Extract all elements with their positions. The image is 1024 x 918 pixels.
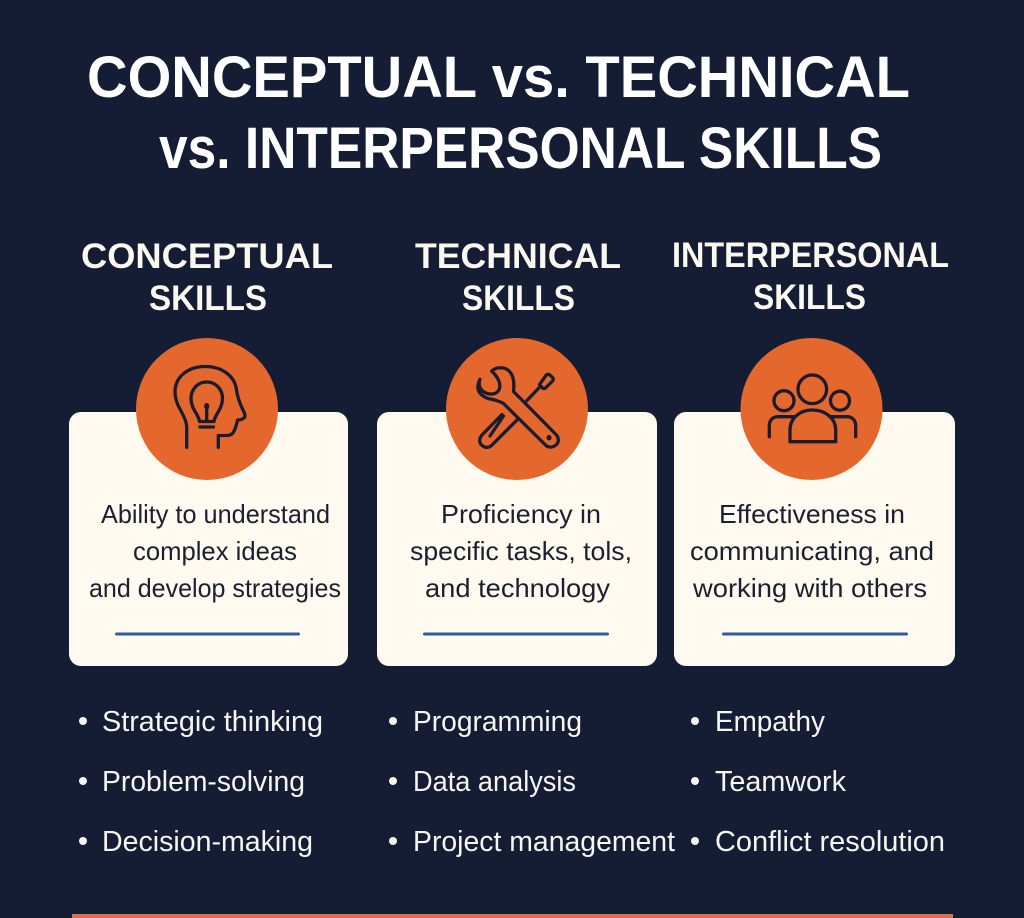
panel: interpersonal skills [672,236,955,858]
card: technical description [377,412,657,666]
heading: conceptual skills: CONCEPTUAL [81,237,333,276]
heading: technical skills: SKILLS [462,279,575,318]
title: CONCEPTUAL vs. TECHNICAL [87,45,910,110]
card: interpersonal description: working with others [692,573,927,603]
bullet list: interpersonal: Conflict resolution [715,826,945,858]
panel: conceptual skills [69,237,348,858]
bullet list: technical [389,706,675,858]
icon: group of people [740,338,882,480]
heading: technical skills: TECHNICAL [415,237,621,276]
bullet list: interpersonal [691,706,945,858]
heading: interpersonal skills: INTERPERSONAL [672,236,949,275]
card: conceptual description: complex ideas [133,536,297,566]
bullet list: conceptual: Problem-solving [102,766,305,798]
bullet list: technical: Programming [413,706,582,738]
card: interpersonal description: communicating, and [690,536,934,566]
bullet list: conceptual: Strategic thinking [102,706,323,738]
heading: technical skills [415,237,621,318]
heading: conceptual skills [81,237,333,318]
heading: interpersonal skills: SKILLS [753,278,866,317]
bullet list: technical: Data analysis [413,766,576,798]
icon: head with light bulb [136,338,278,480]
card: conceptual description: and develop strategies [89,573,341,603]
card: technical description: and technology [425,573,610,603]
card: conceptual description: Ability to understand [101,499,330,529]
bullet list: interpersonal: Empathy [715,706,825,738]
card: conceptual description [69,412,348,666]
bullet list: conceptual: Decision-making [102,826,313,858]
bottom accent bar [72,914,953,918]
panel: technical skills [377,237,675,858]
card: interpersonal description: Effectiveness in [719,499,905,529]
title [87,45,910,181]
bullet list: conceptual [79,706,323,858]
title: vs. INTERPERSONAL SKILLS [159,116,882,181]
bullet list: interpersonal: Teamwork [715,766,846,798]
icon: wrench and screwdriver [446,338,588,480]
card: technical description: specific tasks, tols, [410,536,632,566]
card: interpersonal description [674,412,955,666]
card: technical description: Proficiency in [441,499,601,529]
heading: conceptual skills: SKILLS [149,279,267,318]
bullet list: technical: Project management [413,826,675,858]
heading: interpersonal skills [672,236,949,317]
